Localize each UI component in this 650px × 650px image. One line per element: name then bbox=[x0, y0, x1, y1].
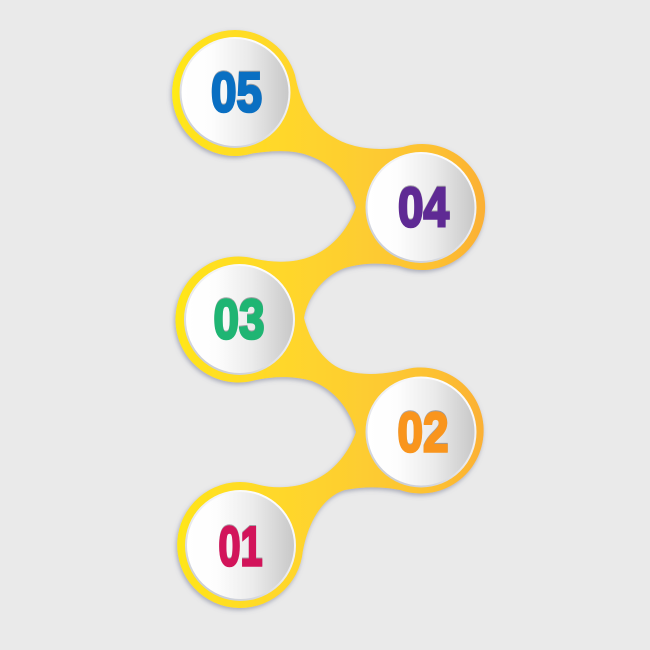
yellow ribbon connecting the five steps bbox=[172, 30, 485, 608]
step 04 badge bbox=[366, 152, 476, 263]
number 01: 01 bbox=[218, 515, 262, 578]
number 05: 05 bbox=[211, 61, 262, 124]
number 03: 03 bbox=[214, 288, 264, 351]
number 04: 04 bbox=[398, 176, 449, 239]
step 03 badge bbox=[184, 264, 295, 375]
step 05 badge bbox=[180, 37, 290, 148]
step 01 badge bbox=[185, 490, 296, 601]
number 02: 02 bbox=[398, 401, 448, 464]
step 02 badge bbox=[366, 376, 476, 488]
